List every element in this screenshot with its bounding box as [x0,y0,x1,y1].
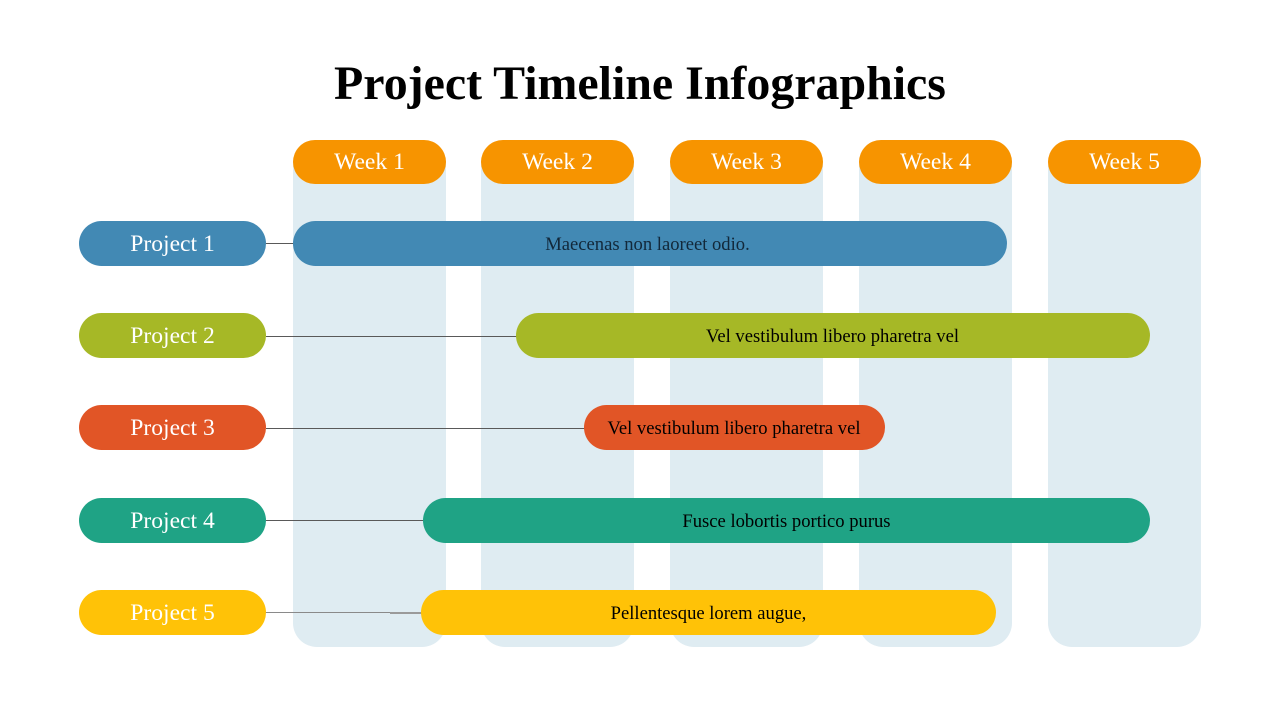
heading: week 2: Week 2 [522,149,593,175]
label: project 4: Project 4 [130,508,215,534]
heading: week 2 [481,140,634,184]
title: Project Timeline Infographics [334,57,946,110]
bar: project 1: Maecenas non laoreet odio. [545,234,750,255]
connector: project 2 [266,336,518,337]
connector: project 5 [266,612,421,614]
label: project 1 [79,221,266,266]
heading: week 3 [670,140,823,184]
heading: week 4 [859,140,1012,184]
bar: project 2: Vel vestibulum libero pharetra vel [706,326,959,347]
panel: week 2 column [481,160,634,647]
label: project 5: Project 5 [130,600,215,626]
connector: project 3 [266,428,586,429]
label: project 2: Project 2 [130,323,215,349]
label: project 3 [79,405,266,450]
bar: project 4: Fusce lobortis portico purus [682,511,891,532]
bar: project 5 [421,590,996,635]
connector: project 4 [266,520,425,521]
connector: project 1 [266,243,296,244]
bar: project 3: Vel vestibulum libero pharetra vel [607,418,860,439]
panel: week 4 column [859,160,1012,647]
heading: week 5: Week 5 [1089,149,1160,175]
heading: week 4: Week 4 [900,149,971,175]
label: project 3: Project 3 [130,415,215,441]
heading: week 1: Week 1 [334,149,405,175]
panel: week 3 column [670,160,823,647]
panel: week 5 column [1048,160,1201,647]
panel: week 1 column [293,160,446,647]
bar: project 5: Pellentesque lorem augue, [611,603,806,624]
label: project 5 [79,590,266,635]
bar: project 3 [584,405,885,450]
label: project 1: Project 1 [130,231,215,257]
label: project 2 [79,313,266,358]
bar: project 4 [423,498,1150,543]
heading: week 1 [293,140,446,184]
label: project 4 [79,498,266,543]
heading: week 5 [1048,140,1201,184]
bar: project 2 [516,313,1150,358]
bar: project 1 [293,221,1007,266]
heading: week 3: Week 3 [711,149,782,175]
